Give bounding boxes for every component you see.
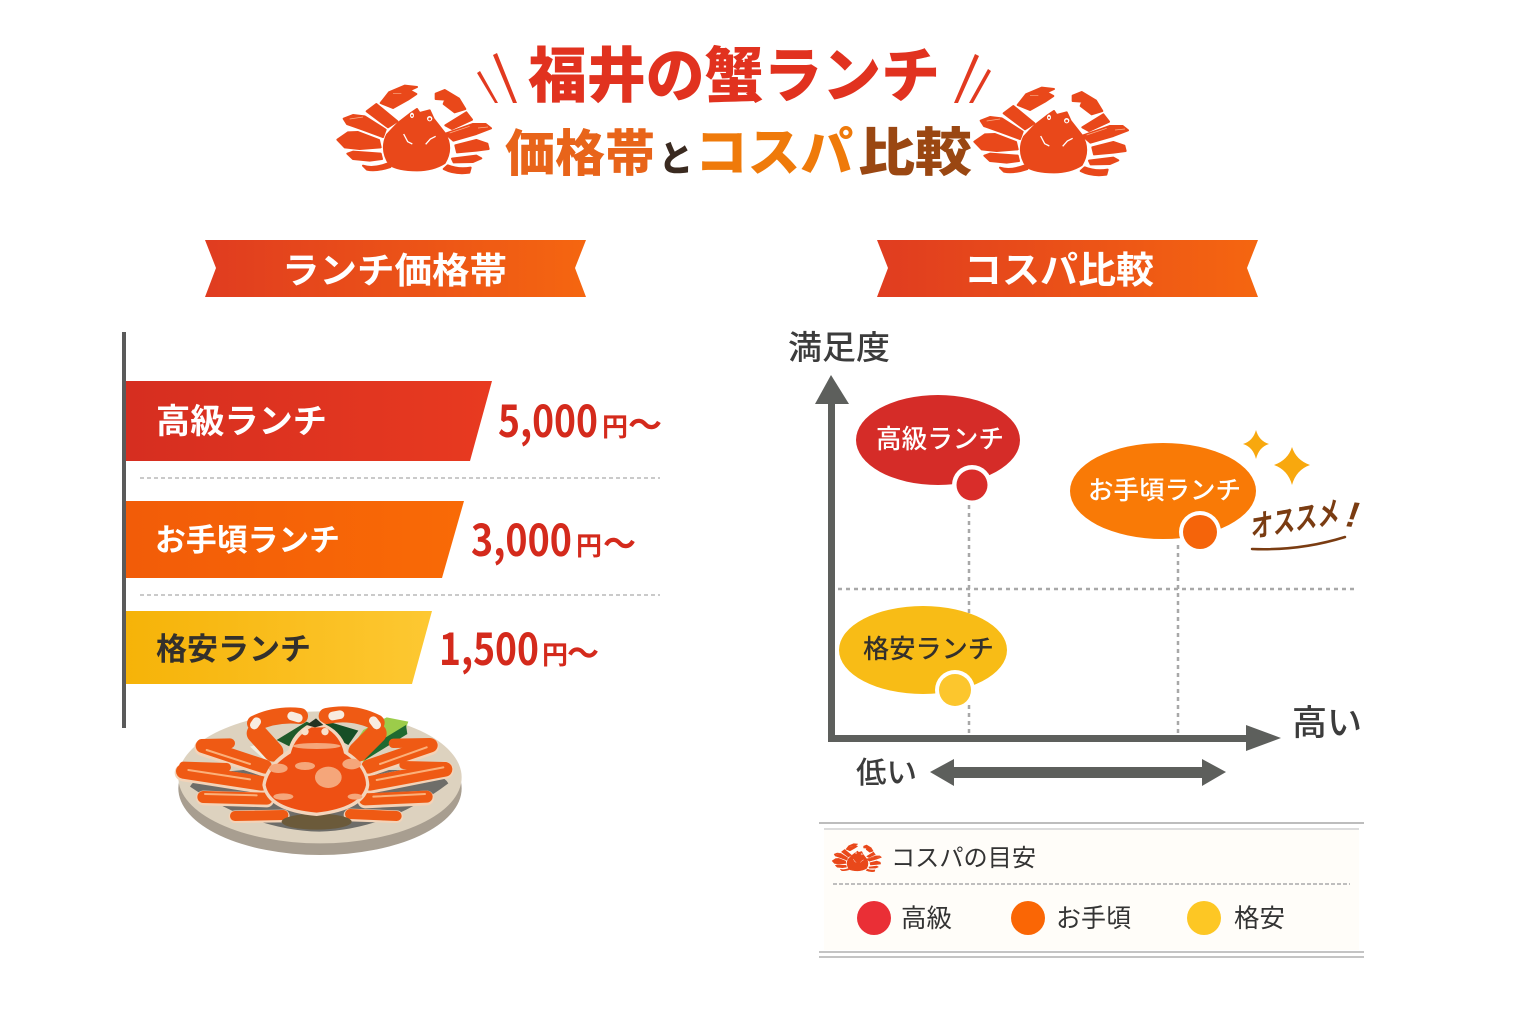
- panel: lunch price range: [122, 240, 662, 855]
- price: 3,000 yen: 3,000: [471, 505, 572, 569]
- title line 2: [505, 125, 972, 183]
- legend item: mid-range: [1011, 901, 1131, 935]
- icon: right title crab: [974, 88, 1128, 175]
- legend item: mid-range: お手頃: [1056, 905, 1131, 933]
- price: 1,500 yen: 1,500: [439, 614, 539, 678]
- bar: premium lunch: [126, 381, 492, 461]
- double-headed arrow: [930, 759, 1226, 786]
- y axis label: 満足度: [788, 329, 890, 366]
- callout: recommended: !: [1344, 493, 1361, 536]
- right accent strokes: [954, 54, 991, 103]
- price: 3,000 yen: 円: [576, 531, 602, 561]
- price: 1,500 yen: 円: [542, 640, 568, 670]
- title line 2: 比較: [858, 125, 972, 183]
- legend: value guide: [819, 822, 1364, 958]
- bubble: premium lunch: [856, 395, 1020, 505]
- x axis label: low: 低い: [856, 757, 917, 790]
- price: 3,000 yen: ～: [603, 526, 636, 564]
- price: 5,000 yen: 5,000: [498, 386, 598, 450]
- title line 1: 福井の蟹ランチ: [528, 43, 940, 110]
- x axis label: high: 高い: [1292, 704, 1362, 743]
- bar: budget lunch: 格安ランチ: [156, 632, 311, 667]
- bar: budget lunch: [126, 611, 432, 684]
- heading banner: lunch price range: ランチ価格帯: [282, 250, 507, 291]
- title line 2: コスパ: [695, 125, 853, 183]
- bar: mid-range lunch: [126, 501, 464, 578]
- heading banner: value comparison: [877, 240, 1258, 297]
- illustration: crab on a plate: [178, 711, 462, 855]
- y axis arrow: [815, 375, 849, 742]
- bubble: mid-range lunch: お手頃ランチ: [1088, 477, 1241, 505]
- bubble: budget lunch: [839, 606, 1007, 710]
- left accent strokes: [477, 53, 517, 103]
- legend item: premium: 高級: [901, 905, 952, 933]
- heading banner: value comparison: コスパ比較: [964, 250, 1154, 291]
- price: 5,000 yen: 円: [602, 412, 628, 442]
- legend item: premium: [857, 901, 952, 935]
- icon: left title crab: [337, 86, 491, 173]
- price: 5,000 yen: ～: [628, 407, 662, 445]
- title line 2: と: [659, 138, 693, 179]
- legend item: budget: [1187, 901, 1285, 935]
- bubble: budget lunch: 格安ランチ: [863, 634, 994, 664]
- body: [262, 718, 369, 816]
- legend item: budget: 格安: [1234, 905, 1285, 933]
- bar: premium lunch: 高級ランチ: [156, 403, 327, 441]
- bubble: mid-range lunch: [1070, 443, 1256, 553]
- title block: [337, 43, 1128, 183]
- title line 2: 価格帯: [505, 126, 655, 182]
- heading banner: lunch price range: [205, 240, 586, 297]
- x axis arrow: [828, 725, 1281, 751]
- bar: mid-range lunch: お手頃ランチ: [155, 523, 340, 558]
- chart: satisfaction vs price: [788, 329, 1362, 790]
- legend title: コスパの目安: [891, 845, 1036, 872]
- bubble: premium lunch: 高級ランチ: [876, 424, 1004, 454]
- icon: small crab: [832, 844, 881, 872]
- icon: sparkles: [1243, 430, 1310, 485]
- price: 1,500 yen: ～: [567, 635, 599, 672]
- vertical axis: [122, 332, 126, 728]
- callout: recommended: オススメ: [1251, 496, 1340, 545]
- panel: value comparison: [788, 240, 1364, 958]
